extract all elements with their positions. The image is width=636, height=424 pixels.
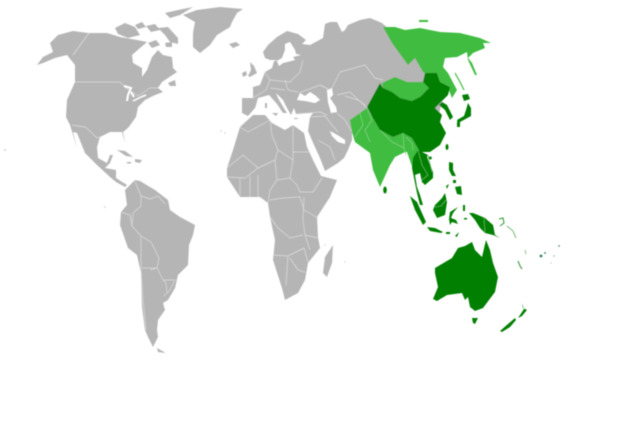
- Canadian Arctic islands: [115, 7, 193, 86]
- Korea: [439, 102, 453, 120]
- South Asia light green: [350, 108, 420, 187]
- Mongolia: [382, 77, 429, 101]
- Wrangel Island: [419, 20, 428, 22]
- Hainan: [428, 156, 432, 160]
- South America: [120, 180, 195, 353]
- Sri Lanka: [383, 186, 387, 194]
- Black Sea: [297, 92, 320, 103]
- Philippines: [446, 162, 462, 195]
- Australia: [433, 240, 498, 311]
- Tasmania: [472, 318, 478, 324]
- Sakhalin: [455, 73, 464, 90]
- Madagascar: [323, 245, 333, 277]
- Japan: [457, 94, 471, 127]
- Iceland: [229, 42, 240, 48]
- Africa: [227, 115, 337, 300]
- British Isles: [242, 62, 257, 77]
- Baltic Sea: [277, 42, 301, 66]
- Sumatra: [410, 196, 426, 225]
- Eurasia grey land: [242, 18, 445, 171]
- New Zealand: [500, 303, 527, 332]
- Maluku: [463, 205, 467, 220]
- Melanesia islands: [499, 218, 560, 269]
- Java and Lesser Sunda: [427, 227, 459, 237]
- Caribbean islands: [117, 150, 142, 164]
- New Guinea: [469, 213, 500, 238]
- Light green Russian Far East: [383, 27, 491, 98]
- Mediterranean islands: [265, 103, 298, 119]
- Borneo: [433, 193, 447, 218]
- Caspian Sea: [327, 88, 337, 113]
- Sulawesi: [449, 207, 458, 225]
- Caribbean and Atlantic specks: [4, 130, 346, 263]
- China: [367, 73, 450, 152]
- Mainland Southeast Asia: [412, 150, 433, 205]
- Greenland: [183, 7, 243, 53]
- Persian Gulf: [330, 131, 345, 144]
- Taiwan: [446, 144, 448, 150]
- North America: [37, 7, 193, 187]
